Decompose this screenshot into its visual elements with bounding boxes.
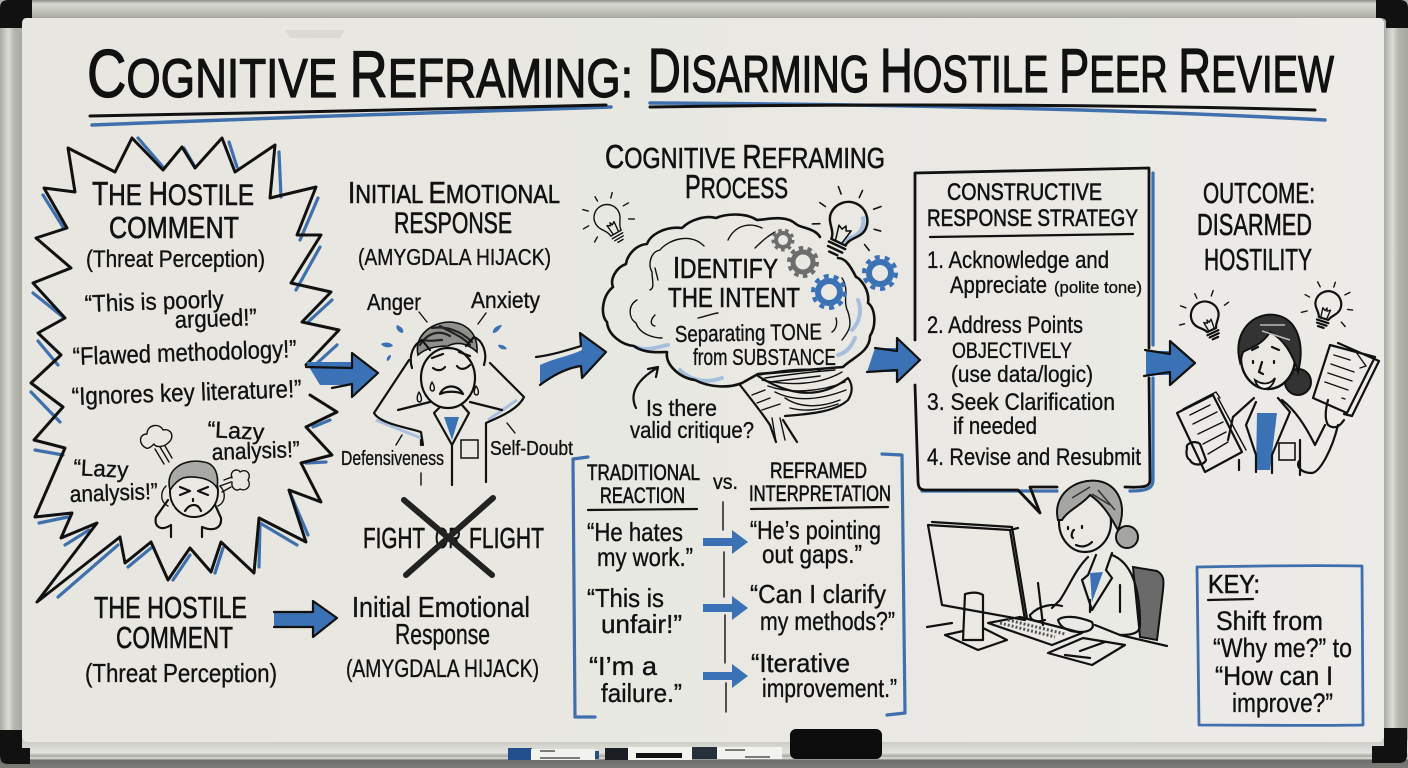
burst heading: (Threat Perception) — [86, 246, 265, 273]
key label: KEY: — [1208, 569, 1260, 599]
key text: improve?” — [1232, 688, 1333, 718]
hostile quotes: “Ignores key literature!” — [71, 375, 302, 411]
summary: emotional response: Response — [395, 619, 490, 651]
process heading: PROCESS — [685, 168, 788, 205]
emotion labels: Anger — [367, 289, 421, 315]
arrow: strategy to outcome — [1144, 341, 1195, 385]
emotion labels — [341, 287, 573, 485]
key text: Shift from — [1216, 606, 1323, 636]
head and hair — [1057, 481, 1138, 552]
row: this is unfair: unfair!” — [601, 609, 682, 639]
strategy steps: 4. Revise and Resubmit — [927, 444, 1141, 471]
crossed-out fight or flight: FLIGHT — [469, 523, 544, 555]
hostile quotes — [69, 286, 302, 507]
column headers: INTERPRETATION — [749, 481, 891, 506]
key text — [1213, 606, 1352, 718]
strategy steps: 1. Acknowledge and — [927, 247, 1109, 274]
strategy heading — [927, 179, 1138, 237]
computer and desk — [927, 522, 1167, 665]
outcome heading: OUTCOME: — [1203, 178, 1315, 210]
strategy steps: 2. Address Points — [927, 312, 1083, 339]
panel: constructive response strategy — [915, 168, 1153, 513]
column headers: vs. — [713, 471, 738, 494]
icon: small light bulb — [572, 184, 643, 254]
arrow: summary flow — [274, 601, 337, 637]
title: DISARMING HOSTILE PEER REVIEW — [648, 37, 1334, 106]
icon: large light bulb — [803, 176, 893, 268]
emotional response heading: RESPONSE — [394, 207, 512, 240]
column headers: REACTION — [600, 483, 685, 508]
summary: hostile comment: COMMENT — [116, 620, 233, 655]
row: this is unfair: “This is — [587, 583, 664, 613]
strategy steps: OBJECTIVELY — [952, 338, 1072, 363]
summary: hostile comment — [85, 590, 277, 688]
panel: outcome — [1170, 178, 1379, 475]
panel: initial emotional response — [341, 175, 573, 575]
emotion labels: Self-Doubt — [490, 438, 573, 460]
icon: angry reviewer with steam clouds — [140, 425, 249, 537]
strategy steps — [927, 247, 1142, 471]
title: COGNITIVE REFRAMING: — [87, 36, 633, 112]
writing hand and pen — [1030, 583, 1093, 632]
hostile quotes: “Lazy — [73, 454, 130, 483]
black marker — [605, 747, 692, 760]
row: i'm a failure: “I’m a — [589, 651, 658, 681]
hostile quotes: argued!” — [174, 304, 257, 334]
callout: valid critique: valid critique? — [630, 417, 754, 443]
title underlines — [90, 103, 1325, 125]
outcome heading: DISARMED — [1197, 207, 1312, 242]
panel: cognitive reframing process — [572, 138, 896, 443]
row: he hates my work: “He’s pointing — [750, 515, 881, 545]
strategy heading: RESPONSE STRATEGY — [927, 205, 1138, 232]
icon: stressed researcher — [374, 322, 524, 485]
crossed-out fight or flight — [363, 498, 544, 575]
row: i'm a failure — [589, 648, 897, 708]
column headers: TRADITIONAL — [587, 460, 700, 485]
comparison brackets — [573, 454, 905, 717]
strategy speech box — [915, 168, 1153, 513]
brain text: Separating TONE — [675, 318, 822, 347]
column headers: REFRAMED — [770, 458, 867, 483]
icon: confident researcher with papers — [1177, 315, 1379, 475]
hostile quotes: analysis!” — [69, 478, 158, 507]
lab coat and blue shirt — [1052, 553, 1140, 635]
icon: brain outline — [603, 214, 874, 442]
speech burst outline — [31, 138, 339, 602]
arrow: response to reframing — [536, 333, 606, 385]
callout: valid critique — [630, 367, 754, 443]
row: i'm a failure: failure.” — [601, 678, 682, 708]
emotion labels: Anxiety — [471, 287, 540, 313]
row: i'm a failure: improvement.” — [762, 673, 897, 703]
center divider — [723, 502, 726, 712]
process heading: COGNITIVE REFRAMING — [605, 138, 885, 175]
icon: left bulb — [1170, 282, 1240, 350]
icon: gears — [773, 230, 896, 308]
column headers — [587, 458, 891, 510]
eraser — [790, 729, 882, 759]
crossed-out fight or flight: OR — [435, 523, 461, 555]
brain text: from SUBSTANCE — [693, 344, 836, 370]
emotion labels: Defensiveness — [341, 448, 444, 470]
hostile quotes: “Lazy — [207, 416, 266, 445]
key box — [1197, 566, 1363, 725]
row: he hates my work: my work.” — [597, 542, 693, 572]
brain stem and cerebellum — [740, 369, 852, 442]
hostile quotes: analysis!” — [211, 436, 300, 465]
arrow: reframing to strategy — [867, 338, 920, 382]
key text: “How can I — [1215, 661, 1333, 691]
summary: hostile comment: THE HOSTILE — [94, 590, 247, 625]
strategy steps: Appreciate — [950, 272, 1047, 299]
row: he hates my work: out gaps.” — [762, 539, 862, 569]
summary: emotional response — [346, 592, 539, 683]
strategy steps: (use data/logic) — [951, 361, 1093, 387]
panel: key takeaway — [1197, 566, 1363, 725]
row: this is unfair: “Can I clarify — [750, 579, 886, 609]
key text: “Why me?” to — [1213, 633, 1352, 663]
row: this is unfair — [587, 579, 895, 639]
row: this is unfair: my methods?” — [760, 606, 895, 636]
outcome heading — [1197, 178, 1315, 277]
outcome heading: HOSTILITY — [1204, 242, 1312, 277]
summary: emotional response: (AMYGDALA HIJACK) — [346, 655, 539, 683]
strategy steps: if needed — [953, 413, 1037, 440]
chair — [1133, 567, 1163, 640]
panel: traditional vs reframed comparison — [573, 454, 905, 717]
dark marker — [692, 747, 782, 759]
brain text — [668, 250, 836, 370]
callout: valid critique: Is there — [646, 395, 717, 421]
title — [87, 36, 1334, 125]
brain text: IDENTIFY — [673, 250, 778, 285]
blue marker — [508, 748, 599, 760]
hostile quotes: “This is poorly — [84, 286, 224, 318]
hostile quotes: “Flawed methodology!” — [72, 335, 297, 371]
row: he hates my work: “He hates — [587, 517, 683, 547]
row: i'm a failure: “Iterative — [751, 648, 850, 678]
process heading — [605, 138, 885, 205]
arrow: burst to emotional response — [306, 353, 378, 397]
burst heading: COMMENT — [109, 210, 239, 245]
marker tray: pens and eraser — [508, 729, 882, 760]
icon: right bulb — [1297, 275, 1359, 335]
crossed-out fight or flight: FIGHT — [363, 523, 425, 555]
icon: researcher at computer — [927, 481, 1167, 665]
strategy steps: (polite tone) — [1054, 278, 1142, 297]
bottom summary flow — [85, 590, 539, 688]
strategy heading: CONSTRUCTIVE — [947, 179, 1102, 206]
emotional response heading: (AMYGDALA HIJACK) — [358, 244, 551, 270]
summary: emotional response: Initial Emotional — [352, 592, 530, 624]
strategy steps: 3. Seek Clarification — [927, 389, 1115, 416]
emotional response heading: INITIAL EMOTIONAL — [348, 175, 560, 210]
summary: hostile comment: (Threat Perception) — [85, 658, 277, 688]
emotional response heading — [348, 175, 560, 270]
brain text: THE INTENT — [668, 282, 800, 313]
burst heading — [86, 175, 265, 273]
panel: hostile comment burst — [31, 138, 339, 602]
row: he hates my work — [587, 515, 881, 572]
burst heading: THE HOSTILE — [92, 175, 254, 212]
